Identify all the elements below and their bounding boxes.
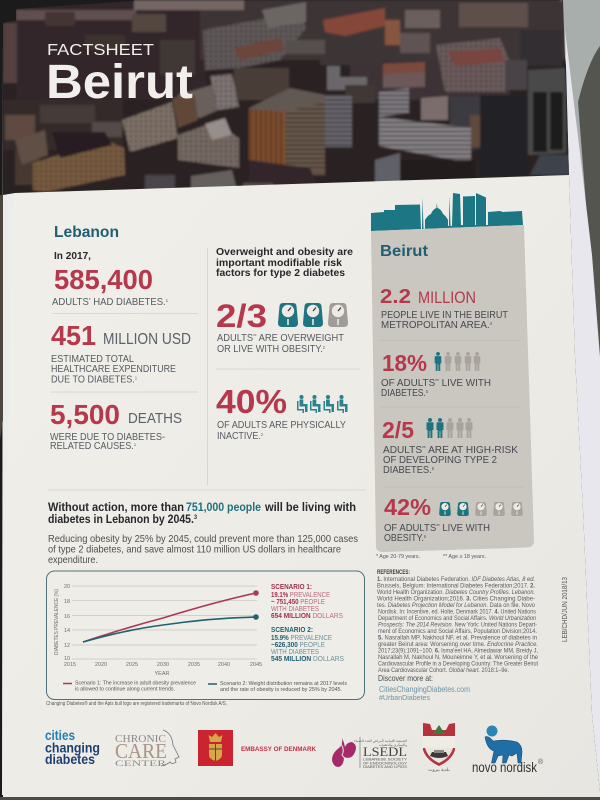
callout: without action: will be living with: [264, 502, 356, 514]
stat: 40% physically inactive: 40%: [216, 383, 287, 420]
text: discover more: CitiesChangingDiabetes.com: [379, 684, 470, 694]
title: FACTSHEET Beirut: FACTSHEET: [47, 42, 154, 59]
stat: 2/3 adults overweight: 2: [323, 345, 325, 350]
legend: scenario 1: is allowed to continue along current trends.: [75, 686, 175, 692]
text: reducing obesity: expenditure.: [48, 554, 98, 566]
text: document code: LEB/CHD/JUN 2018/13: [562, 577, 569, 642]
stat: 5,500 deaths: WERE DUE TO DIABETES-: [50, 431, 165, 443]
stat: 585,400 adults: ADULTS: [52, 296, 93, 308]
logo: LSEDL: LSEDL: [363, 744, 407, 759]
stat: 2/3 adults overweight: OR LIVE WITH OBESITY.: [217, 343, 338, 355]
line: scenario 2: [83, 617, 256, 642]
text: scenario 1 results: 654 MILLION DOLLARS: [271, 613, 343, 620]
stat: 18% live with diabetes: [381, 350, 491, 399]
stat: 42% live with obesity: 6: [424, 534, 426, 539]
footnotes: age ranges: [376, 554, 486, 560]
text: scenario 1 results: 19.1% PREVALENCE: [271, 592, 330, 599]
logo: cities changing diabetes: changing: [45, 740, 100, 756]
title: FACTSHEET Beirut: Beirut: [46, 56, 193, 109]
logo: chronic care center: CENTER: [115, 758, 166, 768]
line chart: diabetes prevalence: 16: [64, 614, 70, 620]
stat: 2.2 million: PEOPLE LIVE IN THE BEIRUT: [381, 309, 508, 321]
logo: LSEDL: DIABETES AND LIPIDS: [363, 765, 408, 769]
stat: 2/3 adults overweight: 2/3: [216, 298, 267, 334]
callout: without action: 3: [194, 515, 198, 521]
stat: 18% live with diabetes: OF ADULTS: [381, 377, 439, 389]
references: Brussels, Belgium: International Diabetes Federation;2017. 2.: [377, 582, 535, 590]
references: tes. Diabetes Projection Model for Lebanon. Data on file. Novo: [377, 602, 535, 609]
stat: 5,500 deaths: DEATHS: [128, 410, 182, 427]
line chart: diabetes prevalence: 2025: [126, 662, 138, 668]
stat: 451 million USD: DUE TO DIABETES.: [51, 374, 148, 386]
stat: 42% live with obesity: LIVE WITH: [440, 522, 490, 534]
stat: 42% live with obesity: 42%: [384, 494, 431, 520]
stat: 2/5 high-risk: OF DEVELOPING TYPE 2: [383, 454, 497, 466]
text: scenario 2 results: 545 MILLION DOLLARS: [271, 656, 344, 663]
header photo: Beirut aerial view: [0, 0, 600, 200]
text: scenario 2 results: ~626,300 PEOPLE: [271, 642, 325, 649]
references: Area Cardiovascular Cohort. Global heart. 2018:1–9e.: [378, 667, 509, 674]
stat: 451 million USD: HEALTHCARE EXPENDITURE: [51, 363, 176, 375]
paper white edge band: [565, 30, 600, 792]
panel: Lebanon statistics: [50, 224, 198, 452]
stat: 2/5 high-risk: 2/5: [382, 417, 414, 443]
stat: 2.2 million: 2.2: [380, 286, 411, 308]
stat: 2.2 million: METROPOLITAN AREA.: [381, 319, 497, 331]
line chart: diabetes prevalence: 2035: [188, 662, 200, 668]
logo: cities changing diabetes: [45, 727, 100, 767]
stat: 18% live with diabetes: **: [435, 379, 439, 385]
logo: embassy of Denmark: [198, 730, 316, 766]
references: [377, 569, 538, 674]
stat: 585,400 adults: [52, 264, 168, 308]
icon: Beirut skyline: [371, 193, 523, 231]
line chart: diabetes prevalence: YEAR: [155, 671, 170, 677]
icons: five scales: [439, 502, 523, 516]
text: scenario 1 results: [271, 584, 343, 620]
stat: 42% live with obesity: **: [436, 524, 440, 530]
stat: 18% live with diabetes: DIABETES.: [381, 387, 436, 399]
stat: 5,500 deaths: RELATED CAUSES.: [50, 440, 147, 452]
panel: overweight and obesity: [216, 246, 360, 442]
stat: 451 million USD: MILLION USD: [103, 331, 191, 348]
stat: 42% live with obesity: OBESITY.: [384, 532, 431, 544]
line chart: diabetes prevalence: 2020: [95, 662, 107, 668]
line chart: diabetes prevalence: 14: [64, 628, 70, 634]
references: ment of Economics and Social Affairs, Population Division;2014.: [378, 628, 537, 635]
text: discover more: [378, 673, 470, 702]
text: scenario 2 results: WITH DIABETES: [271, 649, 319, 656]
logo: LSEDL: الجمعية اللبنانية لأمراض الغدد الصماء: [354, 738, 407, 743]
line chart: diabetes prevalence: 12: [64, 643, 70, 649]
footnotes: age ranges: ** Age ≥ 18 years.: [443, 554, 486, 560]
text: scenario 2 results: 15.9% PREVALENCE: [271, 635, 332, 642]
logo: Beirut municipality crest: [423, 723, 455, 772]
line chart: diabetes prevalence: 2015: [64, 662, 76, 668]
legend: scenario 1: [63, 680, 196, 692]
text: discover more: #UrbanDiabetes: [379, 693, 430, 702]
marker: scenario 2 end: [253, 614, 259, 620]
heading: overweight and obesity risk: [216, 246, 353, 279]
callout: without action: diabetes in Lebanon by 2045.: [48, 514, 208, 526]
logo: Novo Nordisk: [472, 726, 544, 775]
stat: 18% live with diabetes: 5: [426, 389, 428, 394]
logo: LSEDL: OF ENDOCRINOLOGY: [363, 762, 408, 766]
stat: 2/5 high-risk: DIABETES.: [383, 464, 438, 476]
stat: 2/3 adults overweight: ADULTS: [217, 332, 258, 344]
line chart: diabetes prevalence: DIABETES PREVALENCE (%): [54, 589, 60, 655]
references: World Health Organization;2016. 3. Cities Changing Diabe-: [377, 596, 535, 602]
heading: overweight and obesity risk: factors for type 2 diabetes: [216, 267, 345, 279]
logo: LSEDL: والسكري والدهنيات: [379, 743, 407, 747]
heading: Lebanon: Lebanon: [54, 224, 119, 241]
text: discover more: Discover more at:: [378, 673, 433, 683]
legend: scenario 2: and the rate of obesity is reduced by 25% by 2045.: [220, 687, 342, 693]
stat: 2.2 million: 4: [490, 321, 492, 326]
heading: overweight and obesity risk: Overweight and obesity are: [216, 246, 353, 258]
line chart: diabetes prevalence: 18: [64, 599, 70, 605]
logo: cities changing diabetes: cities: [45, 727, 75, 743]
stat: 18% live with diabetes: LIVE WITH: [439, 377, 491, 389]
logo: embassy of Denmark: EMBASSY OF DENMARK: [241, 746, 316, 753]
stat: 451 million USD: ESTIMATED TOTAL: [51, 353, 134, 365]
references: 1. International Diabetes Federation. IDF Diabetes Atlas, 8 ed.: [377, 576, 535, 583]
stat: 2/5 high-risk: ADULTS: [383, 444, 424, 456]
stat: 5,500 deaths: 5,500: [50, 399, 120, 430]
line chart: diabetes prevalence: 2040: [218, 662, 230, 668]
icons: four seated people: [297, 395, 348, 413]
references: 2017;23(9):1091–100. 6. Isma'eel HA, Almedawar MM, Breidy J,: [378, 648, 538, 654]
stat: 585,400 adults: *: [89, 298, 91, 304]
callout: without action: Without action, more than: [48, 502, 184, 514]
logo: cities changing diabetes: diabetes: [45, 751, 95, 767]
stat: 585,400 adults: 1: [166, 298, 168, 303]
stat: 5,500 deaths: [50, 399, 182, 452]
stat: 40% physically inactive: INACTIVE.: [217, 430, 268, 442]
legend: scenario 2: Scenario 2: Weight distribution remains at 2017 levels: [220, 681, 347, 687]
text: reducing obesity: Reducing obesity by 25% by 2045, could prevent more than 125,000 cases: [48, 533, 358, 545]
references: REFERENCES:: [377, 569, 410, 576]
icons: three scales: [278, 303, 348, 327]
stat: 2/3 adults overweight: ARE OVERWEIGHT: [257, 332, 345, 344]
line chart: diabetes prevalence: 20: [64, 584, 70, 590]
text: In 2017: In 2017,: [54, 251, 91, 262]
stat: 2/5 high-risk: [382, 417, 518, 476]
logo: chronic care center: CARE: [115, 739, 167, 763]
line: scenario 1: [83, 593, 256, 642]
text: reducing obesity: [48, 533, 358, 566]
stat: 2/5 high-risk: ARE AT HIGH-RISK: [426, 444, 518, 456]
icons: two of five people: [426, 418, 472, 438]
text: scenario 2 results: [271, 627, 344, 663]
stat: 451 million USD: 451: [51, 320, 96, 351]
stat: 2/5 high-risk: **: [422, 446, 426, 452]
callout: without action: [48, 502, 356, 526]
icons: one of five people: [435, 352, 480, 371]
stat: 42% live with obesity: [384, 494, 490, 544]
references: Nordisk. In: Incentive, ed. Holte, Denmark 2017. 4. United Nations: [378, 608, 536, 616]
stat: 2/5 high-risk: 6: [432, 466, 434, 471]
references: Cardiovascular Profile in a Developing Country: The Greater Beirut: [378, 660, 538, 668]
references: Prospects: The 2014 Revision. New York: United Nations Depart-: [378, 622, 537, 628]
stat: 585,400 adults: HAD DIABETES.: [91, 296, 166, 308]
text: reducing obesity: of type 2 diabetes, and save almost 110 million US dollars in healthcare: [48, 544, 341, 556]
text: scenario 1 results: SCENARIO 1:: [271, 584, 312, 591]
text: scenario 1 results: WITH DIABETES: [271, 606, 319, 613]
callout: without action: 751,000 people: [186, 502, 261, 514]
stat: 40% physically inactive: OF ADULTS ARE PHYSICALLY: [217, 419, 346, 431]
logo: chronic care center: CHRONIC: [115, 734, 166, 745]
line chart: diabetes prevalence: 2045: [250, 662, 262, 668]
line chart: diabetes prevalence: 2030: [157, 662, 169, 668]
marker: scenario 1 end: [253, 590, 259, 596]
footnotes: age ranges: * Age 20-79 years.: [376, 554, 420, 560]
panel: Beirut column: [371, 193, 534, 552]
text: scenario 1 results: ~ 751,450 PEOPLE: [271, 599, 325, 606]
logo: LSEDL: [332, 737, 408, 769]
heading: overweight and obesity risk: important modifiable risk: [216, 257, 342, 269]
logo: Novo Nordisk: ®: [538, 758, 544, 766]
stat: 18% live with diabetes: 18%: [382, 350, 427, 376]
line chart: diabetes prevalence: 10: [64, 656, 70, 662]
line chart: diabetes prevalence: [54, 584, 262, 677]
stat: 2/3 adults overweight: **: [253, 334, 257, 340]
stat: 5,500 deaths: 1: [134, 442, 136, 447]
stat: 2.2 million: [380, 286, 508, 331]
stat: 451 million USD: 1: [135, 376, 137, 380]
stat: 585,400 adults: 585,400: [54, 264, 153, 295]
references: 5. Nasrallah MP, Nakhoul NF, et al. Prevalence of diabetes in: [378, 634, 537, 642]
logo: Beirut municipality crest: بلدية بيروت: [428, 767, 450, 772]
legend: scenario 2: [208, 681, 347, 693]
panel background: [371, 225, 534, 552]
stat: 42% live with obesity: OF ADULTS: [384, 522, 442, 534]
references: Nasrallah M, Nakhoul N, Mouneimne Y, et al. Worsening of the: [378, 654, 538, 661]
stat: 40% physically inactive: [216, 383, 346, 442]
references: Department of Economics and Social Affairs. World Urbanization: [378, 615, 536, 622]
logo: Novo Nordisk: novo nordisk: [472, 759, 538, 775]
text: trademark note: Changing Diabetes® and the Apis bull logo are registered trademarks of Novo Nordisk A/S.: [46, 700, 227, 707]
logo: LSEDL: LEBANESE SOCIETY: [363, 758, 408, 762]
stat: 2/3 adults overweight: [216, 298, 345, 355]
logo: chronic care center: [115, 730, 179, 768]
text: scenario 2 results: SCENARIO 2:: [271, 627, 313, 634]
references: greater Beirut area: Worsening over time. Endocrine Practice.: [378, 641, 538, 648]
stat: 40% physically inactive: 2: [261, 432, 263, 437]
legend: scenario 1: Scenario 1: The increase in adult obesity prevalence: [75, 680, 196, 686]
stat: 451 million USD: [51, 320, 191, 386]
references: World Health Organization. Diabetes Country Profiles. Lebanon.: [377, 589, 535, 596]
heading: Beirut: Beirut: [380, 243, 428, 260]
panel: prevalence chart: [46, 571, 364, 700]
stat: 2.2 million: MILLION: [418, 288, 476, 307]
